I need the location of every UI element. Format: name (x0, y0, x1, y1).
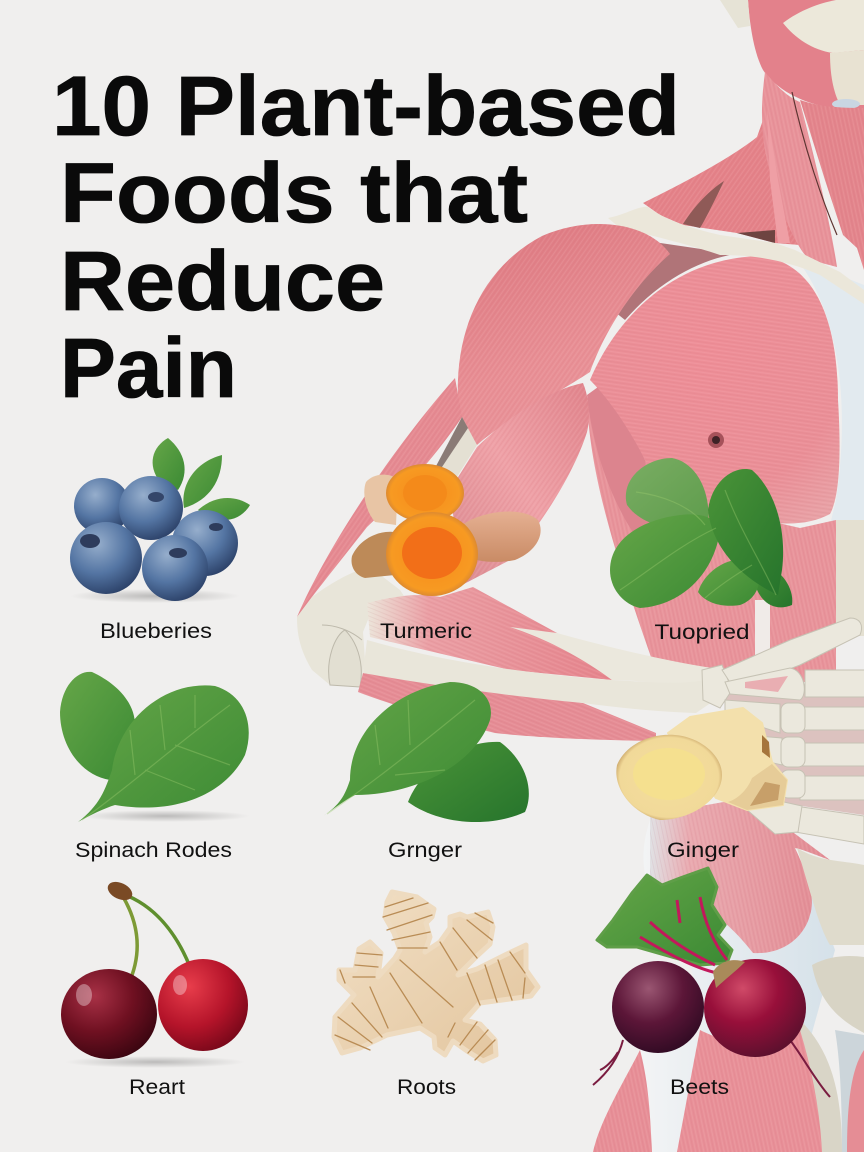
neck and trapezius muscles (643, 72, 864, 270)
lower abdomen muscles (650, 800, 830, 953)
label: Blueberies: Blueberies (100, 620, 212, 643)
food: cherries (61, 878, 248, 1068)
thigh muscles (593, 1030, 822, 1152)
pelvis bones (797, 848, 864, 1152)
food: beets (593, 868, 830, 1097)
pink tissue behind finger bones (720, 680, 864, 815)
shadow below collarbone (600, 240, 735, 320)
forearm bones (363, 627, 715, 713)
pale blue connective tissue, lower torso (640, 820, 835, 1152)
upper arm biceps (450, 383, 589, 585)
title: Reduce (60, 234, 385, 328)
food: spinach leaves centre (323, 682, 529, 822)
food: ginger root (334, 892, 538, 1061)
label: Spinach Rodes: Spinach Rodes (75, 839, 232, 862)
label: Roots: Roots (397, 1076, 456, 1099)
title: Pain (60, 321, 237, 415)
chest nipple marker (708, 432, 724, 448)
forearm flexor muscle (367, 587, 612, 680)
abdomen (587, 382, 864, 682)
food: turmeric (352, 464, 541, 596)
pale sternum and rib centre (796, 258, 864, 525)
food: spinach leaves left (60, 672, 250, 822)
label: Turmeric: Turmeric (380, 620, 472, 643)
food: blueberries (70, 438, 250, 603)
label: Grnger: Grnger (388, 839, 462, 862)
food: spinach cluster (610, 458, 792, 608)
outer forearm muscle (297, 378, 477, 617)
anatomy figure: muscular torso, arm and skeletal hand (297, 0, 864, 1152)
label: Reart: Reart (129, 1076, 185, 1099)
forearm lower muscle (358, 673, 656, 741)
food: ginger slice (616, 708, 787, 820)
wrist bones (297, 567, 410, 687)
face and jaw (720, 0, 864, 109)
label: Ginger: Ginger (667, 839, 739, 862)
label: Beets: Beets (670, 1076, 729, 1099)
chest muscle (590, 256, 840, 524)
shoulder deltoid (458, 224, 670, 445)
collarbone (608, 207, 864, 304)
title: Foods that (60, 146, 528, 240)
title: 10 Plant-based (52, 59, 680, 153)
title (52, 59, 680, 415)
skeletal hand (702, 618, 864, 844)
label: Tuopried: Tuopried (654, 621, 750, 644)
